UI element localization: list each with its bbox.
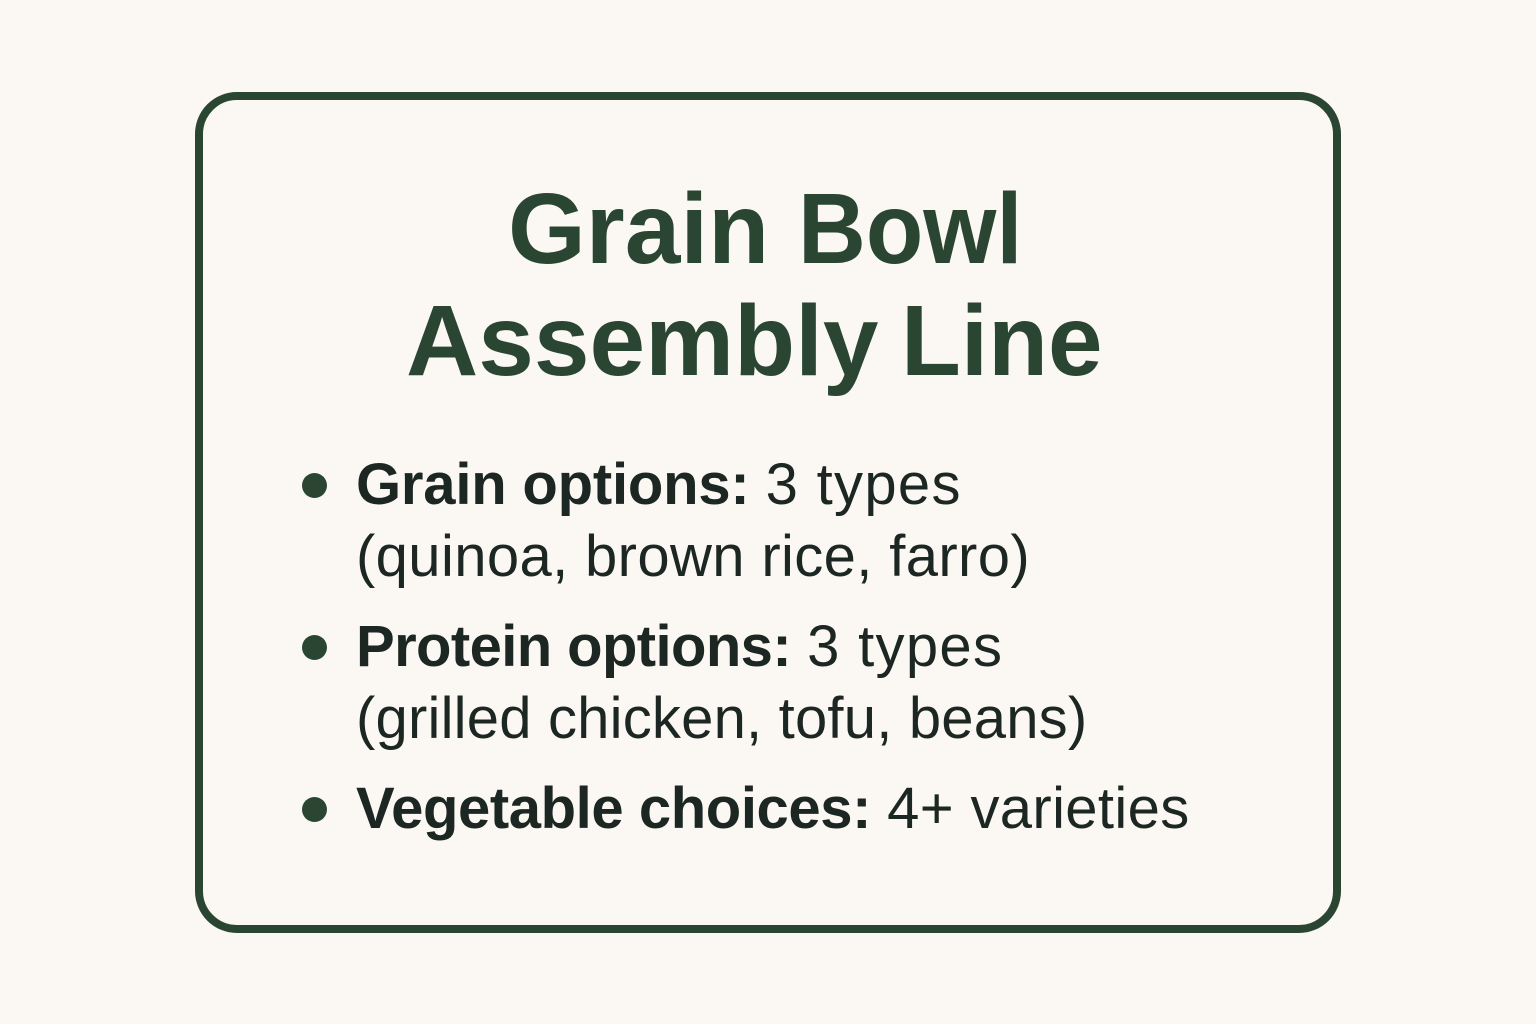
title: Assembly <box>406 285 878 397</box>
title: Line <box>901 285 1102 397</box>
list item: protein options: Protein options: 3 types <box>356 614 1003 679</box>
list item: protein options: (grilled chicken, tofu, beans) <box>356 686 1087 751</box>
title <box>406 173 1102 397</box>
title: Bowl <box>798 173 1023 285</box>
list item: vegetable choices: Vegetable choices: 4+ varieties <box>356 776 1190 841</box>
title: Grain <box>508 173 769 285</box>
list item: grain options: Grain options: 3 types <box>356 452 962 517</box>
panel: card <box>195 92 1341 933</box>
list item: protein options <box>302 614 1087 751</box>
list item: grain options <box>302 452 1030 589</box>
list item: grain options: (quinoa, brown rice, farro) <box>356 524 1030 589</box>
